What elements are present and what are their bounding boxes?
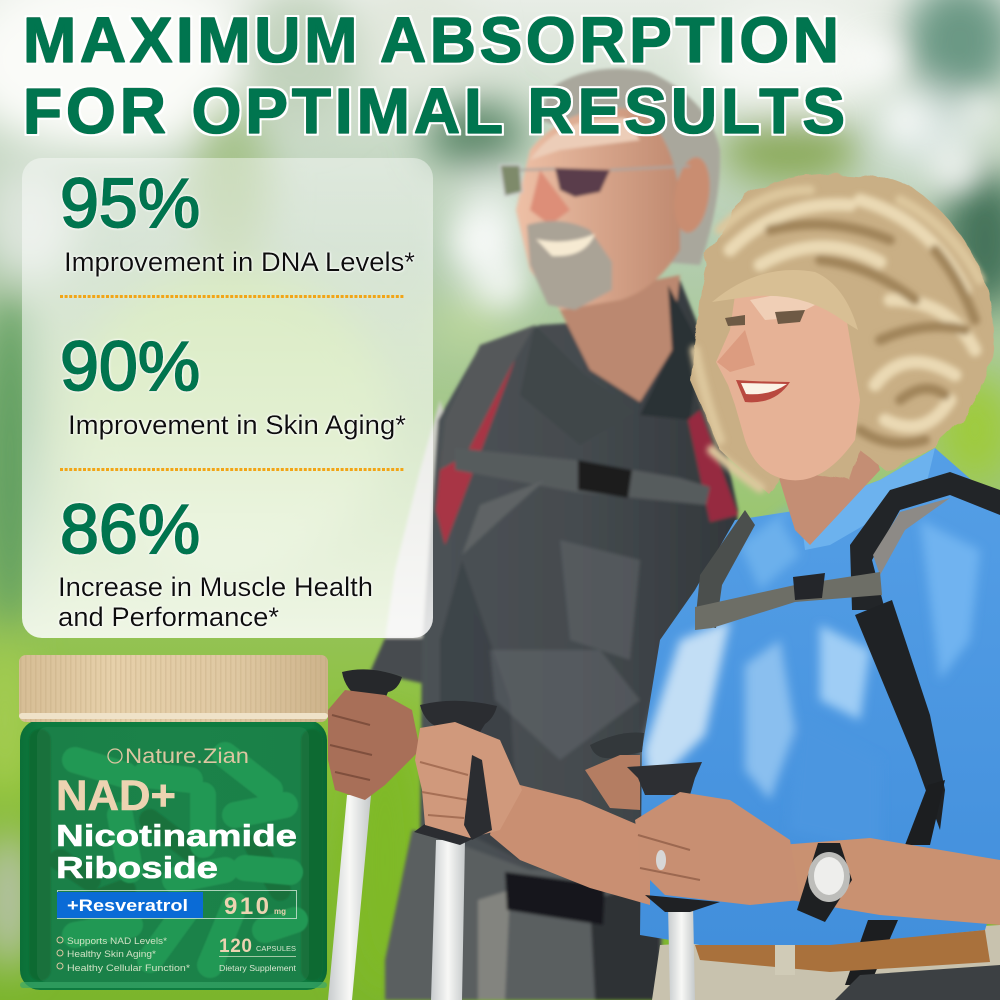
man sleeve <box>385 400 460 640</box>
woman shirt <box>640 448 1000 945</box>
stat: 95%: 95% <box>60 164 200 242</box>
stat: 86%: 86% <box>60 490 200 568</box>
man vest <box>420 280 738 870</box>
capsules inside jar <box>40 740 312 970</box>
stat: 90%: Improvement in Skin Aging* <box>68 410 406 440</box>
resveratrol bar: +Resveratrol <box>67 896 188 915</box>
product name: NAD+ <box>56 772 176 820</box>
man face <box>516 108 680 310</box>
benefits list: Healthy Cellular Function* <box>67 963 190 974</box>
man beard <box>527 221 612 310</box>
trekking pole: woman's left <box>414 701 497 1000</box>
woman backpack straps <box>695 472 1000 985</box>
stats panel <box>22 158 433 638</box>
trekking pole: man's <box>328 669 402 1000</box>
product name: Riboside <box>56 850 218 885</box>
woman belt <box>695 930 990 972</box>
jar glass highlight <box>37 727 309 982</box>
benefits list: Healthy Skin Aging* <box>67 949 156 960</box>
woman hip bag <box>835 965 1000 1000</box>
title: FOR OPTIMAL RESULTS <box>23 75 845 147</box>
stat: 95% <box>60 164 415 277</box>
hand: man's grip <box>328 690 420 800</box>
woman hair <box>690 173 993 495</box>
benefits list <box>57 936 190 974</box>
capsule count: CAPSULES <box>256 944 296 953</box>
jar cap <box>19 655 328 722</box>
resveratrol bar: 910 <box>224 893 269 920</box>
jar body <box>20 720 327 990</box>
woman neck <box>775 430 880 545</box>
man red backpack straps <box>436 360 515 545</box>
hand: man's second hand with grip <box>585 732 644 810</box>
man smile <box>536 234 595 256</box>
product jar <box>19 655 328 990</box>
arm: woman's reaching arm <box>490 780 650 905</box>
stat: 90%: 90% <box>60 327 200 405</box>
resveratrol bar <box>57 890 296 920</box>
stat: 86%: and Performance* <box>58 602 279 632</box>
man hair <box>540 69 720 265</box>
man chest strap with buckle <box>455 448 710 505</box>
grip strip over hand <box>464 755 492 840</box>
man nose <box>530 170 570 225</box>
woman trousers <box>652 925 1000 1000</box>
man trousers <box>385 830 665 1000</box>
man neck <box>555 275 680 402</box>
title: MAXIMUM ABSORPTION <box>23 4 839 76</box>
man belt pack <box>505 872 605 925</box>
person: man (back) <box>370 69 738 1000</box>
hand: woman's left <box>415 722 522 838</box>
benefits list: Supports NAD Levels* <box>67 936 167 947</box>
hand: woman's right <box>635 792 800 905</box>
brand logo: Nature.Zian <box>125 745 249 768</box>
product name <box>56 772 297 885</box>
product name: Nicotinamide <box>56 818 297 853</box>
woman smile <box>736 380 790 402</box>
woman forearm <box>780 838 1000 925</box>
capsule count: Dietary Supplement <box>219 963 297 973</box>
stat: 86%: Increase in Muscle Health <box>58 572 373 602</box>
stat: 90% <box>60 327 406 440</box>
capsule count: 120 <box>219 936 252 957</box>
wristwatch <box>797 843 852 922</box>
woman fringe <box>712 270 858 330</box>
stat: 86% <box>58 490 373 632</box>
title <box>23 4 845 147</box>
trekking pole: woman's right <box>627 762 720 1000</box>
man glasses <box>500 165 690 197</box>
person: woman (front) <box>640 173 1000 1000</box>
resveratrol bar: mg <box>274 907 286 916</box>
woman eyes <box>725 310 805 326</box>
woman nose <box>717 330 755 372</box>
capsule count <box>219 936 297 973</box>
ring <box>656 850 666 870</box>
stat: 95%: Improvement in DNA Levels* <box>64 247 415 277</box>
woman face <box>716 288 860 480</box>
